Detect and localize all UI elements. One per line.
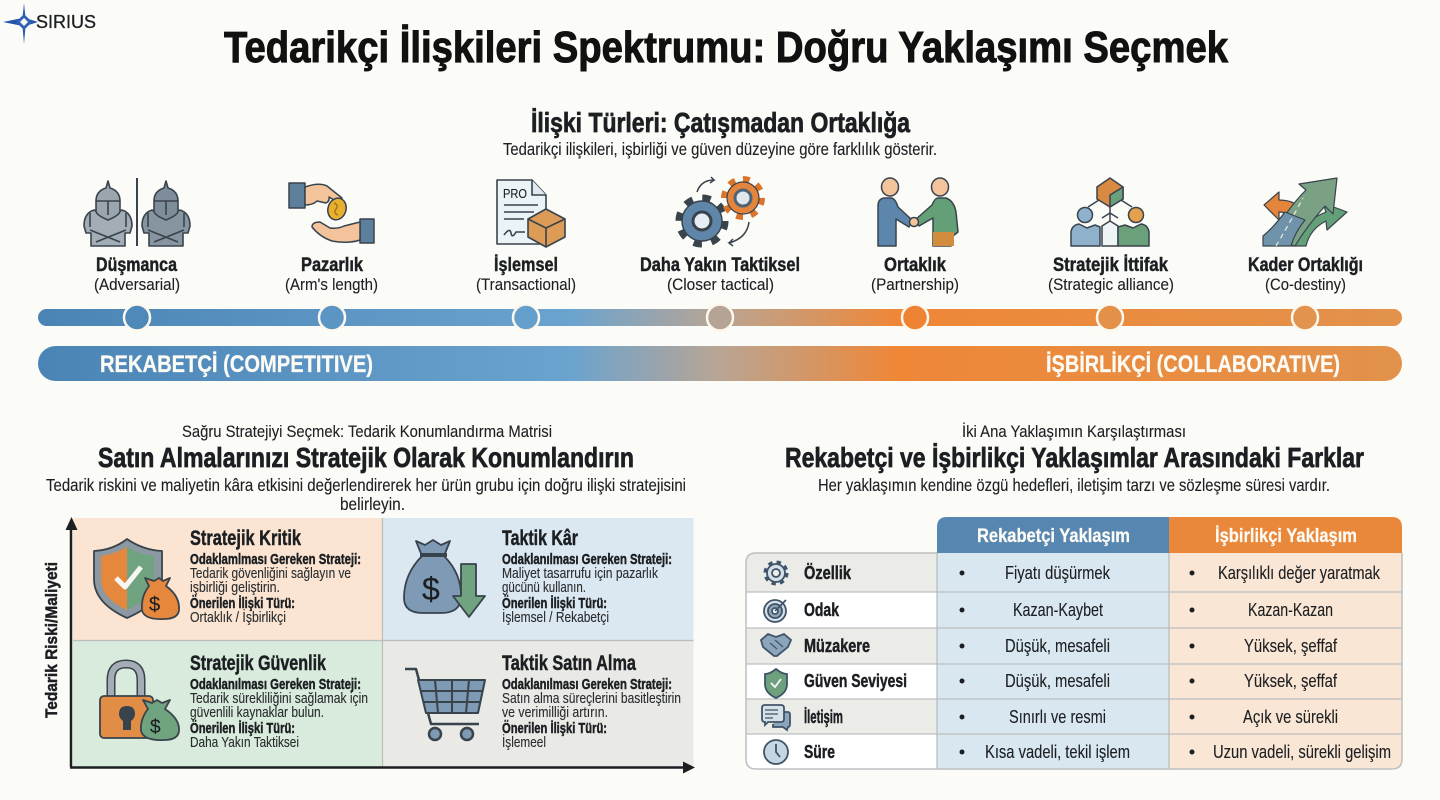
quadrant text: Stratejik Güvenlik: Önerilen İlişki Türü:	[190, 720, 295, 737]
table header: İşbirlikçi Yaklaşım	[1215, 524, 1357, 547]
quadrant text: Stratejik Kritik: Ortaklık / İşbirlikçi	[190, 608, 286, 626]
quadrant text: Stratejik Güvenlik: Stratejik Güvenlik	[190, 652, 326, 675]
competitive column values: Kısa vadeli, tekil işlem	[985, 742, 1130, 762]
section heading: relationship types: İlişki Türleri: Çatışmadan Ortaklığa	[531, 107, 910, 138]
quadrant text: Stratejik Güvenlik	[190, 652, 368, 751]
quadrant text: Stratejik Kritik: Önerilen İlişki Türü:	[190, 595, 295, 612]
row labels: Süre	[804, 742, 835, 762]
competitive to collaborative band: İŞBİRLİKÇİ (COLLABORATIVE)	[1046, 351, 1340, 378]
left heading: matrix	[46, 422, 686, 514]
icon: hands and coin	[289, 183, 374, 243]
icon: money bag with down arrow	[404, 540, 485, 617]
icon: handshake partners	[878, 178, 958, 246]
competitive column values: Sınırlı ve resmi	[1009, 707, 1106, 727]
collaborative column values: Uzun vadeli, sürekli gelişim	[1213, 742, 1391, 762]
labels: relationship types: Stratejik İttifak	[1053, 255, 1168, 276]
competitive column values: Düşük, mesafeli	[1005, 636, 1110, 656]
icon: shopping cart	[405, 669, 485, 740]
quadrant text: Taktik Satın Alma: ve verimilliği artırın.	[502, 705, 608, 721]
left heading: matrix: Sağru Stratejiyi Seçmek: Tedarik Konumlandırma Matrisi	[182, 422, 552, 441]
labels: relationship types: (Partnership)	[871, 275, 959, 294]
competitive column values	[985, 563, 1130, 762]
labels: relationship types: Ortaklık	[884, 255, 946, 276]
row icons	[761, 563, 791, 764]
quadrant text: Taktik Satın Alma: Önerilen İlişki Türü:	[502, 720, 607, 737]
icon: interlocking gears	[680, 177, 761, 246]
icon: padlock with money bag	[100, 664, 179, 740]
labels: relationship types: Pazarlık	[301, 255, 363, 276]
icon: diverging paths	[1263, 178, 1347, 246]
icon: padlock with money bag: $	[150, 717, 161, 738]
row labels: Müzakere	[804, 636, 870, 656]
table header: Rekabetçi Yaklaşım	[977, 525, 1130, 547]
collaborative column values: Yüksek, şeffaf	[1244, 671, 1338, 691]
quadrant text: Taktik Kâr: İşlemsel / Rekabetçi	[502, 608, 609, 626]
labels: relationship types: (Strategic alliance)	[1048, 275, 1174, 294]
quadrant text: Taktik Satın Alma: İşlemeel	[502, 733, 546, 751]
quadrant text: Taktik Kâr: Maliyet tasarrufu için pazarlık	[502, 566, 659, 582]
bullets	[960, 570, 1194, 754]
icon: contract and box: PRO	[503, 186, 527, 201]
icon: knights	[84, 178, 190, 246]
icon: money bag with down arrow: $	[422, 571, 440, 607]
quadrant text: Stratejik Güvenlik: Daha Yakın Taktiksei	[190, 735, 299, 751]
collaborative column values	[1213, 563, 1391, 762]
logo: Sirius: SIRIUS	[36, 12, 96, 32]
right heading: comparison: Her yaklaşımın kendine özgü hedefleri, iletişim tarzı ve sözleşme süresi vardır.	[818, 475, 1330, 495]
labels: relationship types: (Closer tactical)	[667, 275, 774, 294]
collaborative column values: Kazan-Kazan	[1248, 600, 1333, 620]
quadrant text: Taktik Satın Alma: Taktik Satın Alma	[502, 652, 636, 675]
quadrant text: Taktik Kâr	[502, 527, 672, 626]
collaborative column values: Açık ve sürekli	[1243, 707, 1338, 727]
quadrant text: Stratejik Güvenlik: Tedarik sürekliliğini sağlamak için	[190, 691, 368, 707]
quadrant text: Taktik Satın Alma: Satın alma süreçlerini basitleştirin	[502, 691, 681, 707]
labels: relationship types: Kader Ortaklığı	[1248, 255, 1363, 276]
labels: relationship types: Düşmanca	[96, 255, 177, 276]
right heading: comparison: İki Ana Yaklaşımın Karşılaştırması	[962, 422, 1186, 441]
quadrant text: Taktik Satın Alma: Odaklanılması Gereken Strateji:	[502, 677, 672, 693]
labels: relationship types	[94, 255, 1363, 294]
labels: relationship types: İşlemsel	[494, 255, 558, 276]
collaborative column values: Karşılıklı değer yaratmak	[1218, 563, 1381, 583]
quadrant text: Taktik Kâr: Taktik Kâr	[502, 527, 578, 550]
row labels: İletişim	[804, 707, 843, 727]
competitive to collaborative band	[38, 346, 1402, 381]
spectrum track with markers	[38, 304, 1402, 330]
left heading: matrix: Tedarik riskini ve maliyetin kâra etkisini değerlendirerek her ürün grubu için doğru ilişki stratejisini	[46, 475, 686, 495]
quadrant text: Stratejik Güvenlik: güvenlili kaynaklar bulun.	[190, 705, 324, 721]
competitive column values: Kazan-Kaybet	[1013, 600, 1103, 620]
icon: shield with money bag: $	[149, 594, 160, 616]
icon: contract and box	[497, 180, 565, 247]
left heading: matrix: Satın Almalarınızı Stratejik Olarak Konumlandırın	[98, 442, 634, 473]
y axis label: Tedarik Riski/Maliyeti	[43, 562, 61, 718]
quadrant text: Stratejik Kritik: Stratejik Kritik	[190, 527, 301, 550]
labels: relationship types: (Co-destiny)	[1265, 275, 1346, 294]
table backgrounds	[746, 553, 1402, 769]
section heading: relationship types	[503, 107, 937, 159]
logo: Sirius	[3, 3, 96, 44]
labels: relationship types: (Adversarial)	[94, 275, 180, 294]
icon: shield with money bag	[94, 539, 179, 619]
labels: relationship types: Daha Yakın Taktiksel	[640, 255, 800, 276]
quadrant text: Taktik Kâr: Odaklanılması Gereken Strateji:	[502, 552, 672, 568]
row labels: Güven Seviyesi	[804, 671, 907, 691]
quadrant text: Stratejik Kritik	[190, 527, 361, 626]
competitive column values: Düşük, mesafeli	[1005, 671, 1110, 691]
row labels: Özellik	[804, 563, 852, 583]
collaborative column values: Yüksek, şeffaf	[1244, 636, 1338, 656]
quadrant text: Stratejik Güvenlik: Odaklanılması Gereken Strateji:	[190, 677, 361, 693]
matrix axes	[66, 517, 695, 774]
labels: relationship types: (Transactional)	[476, 275, 576, 294]
quadrant text: Taktik Satın Alma	[502, 652, 681, 751]
row labels: Odak	[804, 600, 840, 620]
comparison table	[746, 517, 1402, 769]
quadrant text: Taktik Kâr: gücünü kullanın.	[502, 580, 586, 596]
quadrant text: Stratejik Kritik: Tedarik gövenliğini sağlayın ve	[190, 566, 351, 582]
competitive column values: Fiyatı düşürmek	[1005, 563, 1111, 583]
quadrant text: Taktik Kâr: Önerilen İlişki Türü:	[502, 595, 607, 612]
right heading: comparison	[785, 422, 1364, 495]
matrix quadrants	[73, 518, 694, 767]
quadrant text: Stratejik Kritik: işbirliği geliştirin.	[190, 580, 280, 596]
table header	[937, 517, 1402, 553]
title: Tedarikçi İlişkileri Spektrumu: Doğru Yaklaşımı Seçmek	[224, 23, 1228, 72]
quadrant text: Stratejik Kritik: Odaklamlması Gereken Strateji:	[190, 552, 361, 568]
section heading: relationship types: Tedarikçi ilişkileri, işbirliği ve güven düzeyine göre farklılık gösterir.	[503, 139, 937, 159]
icon: strategic alliance	[1071, 178, 1149, 246]
row labels	[804, 563, 907, 762]
left heading: matrix: belirleyin.	[340, 494, 405, 514]
competitive to collaborative band: REKABETÇİ (COMPETITIVE)	[100, 351, 373, 378]
labels: relationship types: (Arm's length)	[285, 275, 378, 294]
